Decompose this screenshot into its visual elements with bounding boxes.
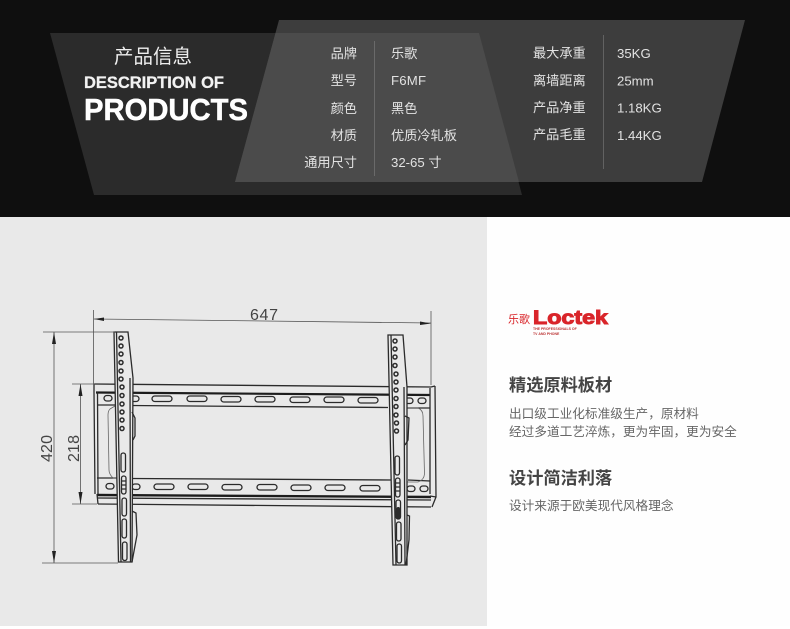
logo: Loctek: TV AND PHONE (533, 332, 560, 336)
rails (94, 384, 436, 507)
dimension: height 218: 218 (66, 435, 83, 462)
technical drawing: wall mount (94, 332, 436, 565)
spec labels: 品牌 (331, 45, 357, 61)
spec labels: 材质 (331, 128, 357, 143)
spec labels: 离墙距离 (533, 72, 586, 88)
title block (84, 46, 248, 127)
dimension: height 420 (39, 332, 118, 563)
vertical slots (121, 453, 127, 560)
feature text: 经过多道工艺淬炼，更为牢固，更为安全 (509, 424, 737, 439)
title: Chinese: 产品信息 (114, 46, 192, 68)
spec values (391, 46, 457, 170)
spec values: 黑色 (391, 100, 417, 116)
logo wordmark: Loctek (533, 307, 608, 329)
panel: left trapezoid (50, 33, 522, 195)
feature heading: 设计简洁利落 (509, 468, 612, 488)
title: products: PRODUCTS (84, 93, 248, 127)
spec values (617, 46, 662, 143)
spec labels: 产品净重 (533, 100, 586, 115)
holes (119, 336, 124, 430)
spec labels: 颜色 (331, 100, 357, 116)
feature text (509, 407, 737, 439)
logo: Loctek (508, 307, 608, 336)
spec values: 乐歌 (391, 46, 417, 61)
dimension: width 647 (94, 307, 431, 385)
spec values: 1.18KG (617, 100, 662, 116)
dimension: height 218 (66, 384, 97, 504)
lower slots (106, 484, 428, 492)
left bracket (114, 332, 137, 562)
vertical slots (395, 456, 402, 563)
feature text: 设计来源于欧美现代风格理念 (509, 498, 674, 513)
spec labels: 型号 (331, 73, 357, 88)
right text panel (487, 217, 790, 626)
dimension: width 647: 647 (250, 307, 278, 324)
logo Chinese name: 乐歌 (508, 312, 530, 326)
upper slots (104, 396, 426, 404)
holes (393, 339, 398, 433)
dimension: height 420: 420 (39, 435, 56, 462)
spec values: 25mm (617, 74, 654, 88)
spec table: left column (304, 41, 457, 176)
header background (0, 0, 790, 217)
spec values: 优质冷轧板 (391, 128, 457, 143)
spec values: 1.44KG (617, 128, 662, 143)
spec labels: 通用尺寸 (304, 155, 357, 170)
panel: right trapezoid (235, 20, 745, 182)
spec table: right column (533, 35, 662, 169)
feature: design (509, 468, 674, 513)
feature: materials (509, 375, 737, 439)
left drawing panel (0, 217, 487, 626)
title: description of: DESCRIPTION OF (84, 74, 224, 92)
spec labels (533, 46, 586, 142)
logo tagline: THE PROFESSIONALS OF (533, 327, 578, 331)
spec values: 32-65 寸 (391, 155, 442, 170)
side plates (108, 406, 424, 482)
spec labels (304, 45, 357, 170)
spec divider (374, 41, 375, 176)
spec labels: 产品毛重 (533, 127, 586, 142)
spec values: 35KG (617, 46, 651, 61)
spec values: F6MF (391, 73, 426, 88)
feature text: 出口级工业化标准级生产，原材料 (509, 407, 699, 421)
right bracket (388, 335, 410, 565)
spec divider (603, 35, 604, 169)
feature heading: 精选原料板材 (509, 375, 612, 395)
panel: trapezoid overlap (235, 33, 519, 182)
spec labels: 最大承重 (533, 46, 586, 60)
